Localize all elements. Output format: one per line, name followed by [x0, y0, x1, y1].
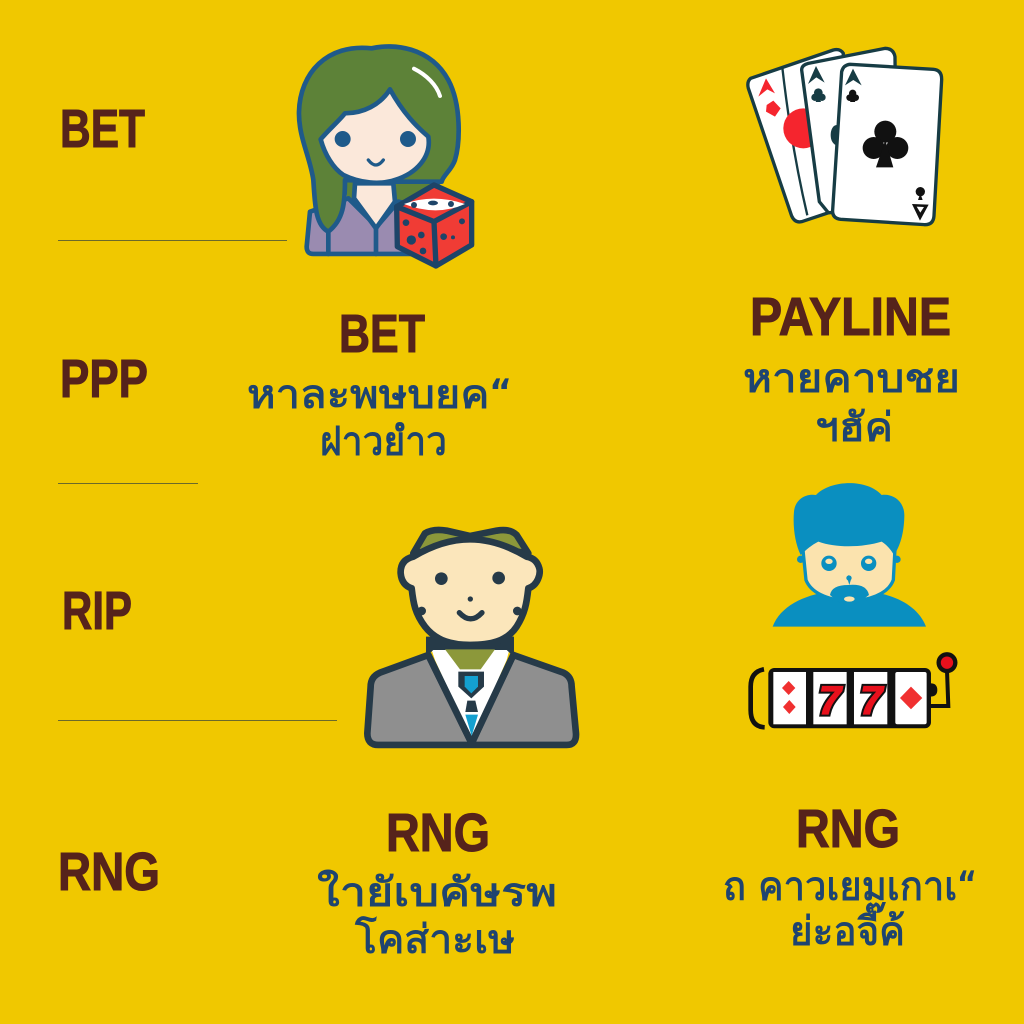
left column terms: [58, 99, 337, 902]
icon: slot machine: [751, 654, 955, 728]
icon: woman with dice: [299, 46, 472, 266]
term: BET: BET: [60, 99, 145, 159]
middle card: [802, 48, 897, 213]
dice: [397, 185, 472, 266]
woman body: [307, 198, 420, 254]
caption: PAYLINE: ฯฮัค่: [815, 405, 893, 451]
icon: blue bearded man: [773, 483, 926, 627]
icon: slot machine: 7: [819, 679, 843, 723]
icon: businessman: [367, 530, 576, 745]
icon: slot machine: 7: [819, 679, 843, 723]
hair: [794, 483, 904, 555]
term: RNG: RNG: [58, 842, 160, 902]
back card: [748, 50, 843, 222]
machine body: [751, 669, 765, 727]
reel symbols: [782, 681, 922, 714]
term: RIP: RIP: [62, 581, 132, 641]
icon: slot machine: 7: [860, 679, 884, 723]
beard: [830, 585, 869, 607]
head: [401, 539, 540, 645]
caption: RNG middle: โคส่าะเษ: [355, 917, 515, 963]
hair: [413, 530, 528, 553]
caption: BET: ฝาวยำว: [320, 419, 447, 465]
face: [321, 89, 429, 183]
caption: BET: [247, 304, 512, 465]
term: PPP: PPP: [60, 349, 148, 409]
caption: PAYLINE: [743, 287, 960, 451]
caption: RNG right: ถ คาวเยมเกาเ“: [723, 864, 977, 910]
icon: slot machine: 7: [860, 679, 884, 723]
caption: RNG middle: [317, 803, 557, 963]
caption: RNG middle: ใายัเบคัษรพ: [317, 869, 557, 916]
front card: [833, 64, 942, 225]
shoulders: [773, 592, 926, 627]
hair back: [343, 177, 443, 207]
lever: [930, 683, 937, 697]
caption: PAYLINE: หายคาบชย: [743, 356, 960, 402]
caption: RNG middle: RNG: [386, 803, 490, 863]
icon: playing cards: [748, 48, 942, 225]
face: [802, 537, 896, 602]
caption: RNG right: ย่ะอจี๊ค้: [790, 902, 905, 955]
hair: [299, 46, 459, 232]
caption: PAYLINE: PAYLINE: [750, 287, 951, 347]
caption: BET: หาละพษบยค“: [247, 372, 512, 418]
caption: RNG right: RNG: [796, 799, 900, 859]
caption: RNG right: [723, 799, 977, 955]
caption: BET: BET: [339, 304, 425, 364]
shirt and tie: [432, 650, 509, 740]
suit: [367, 655, 576, 745]
